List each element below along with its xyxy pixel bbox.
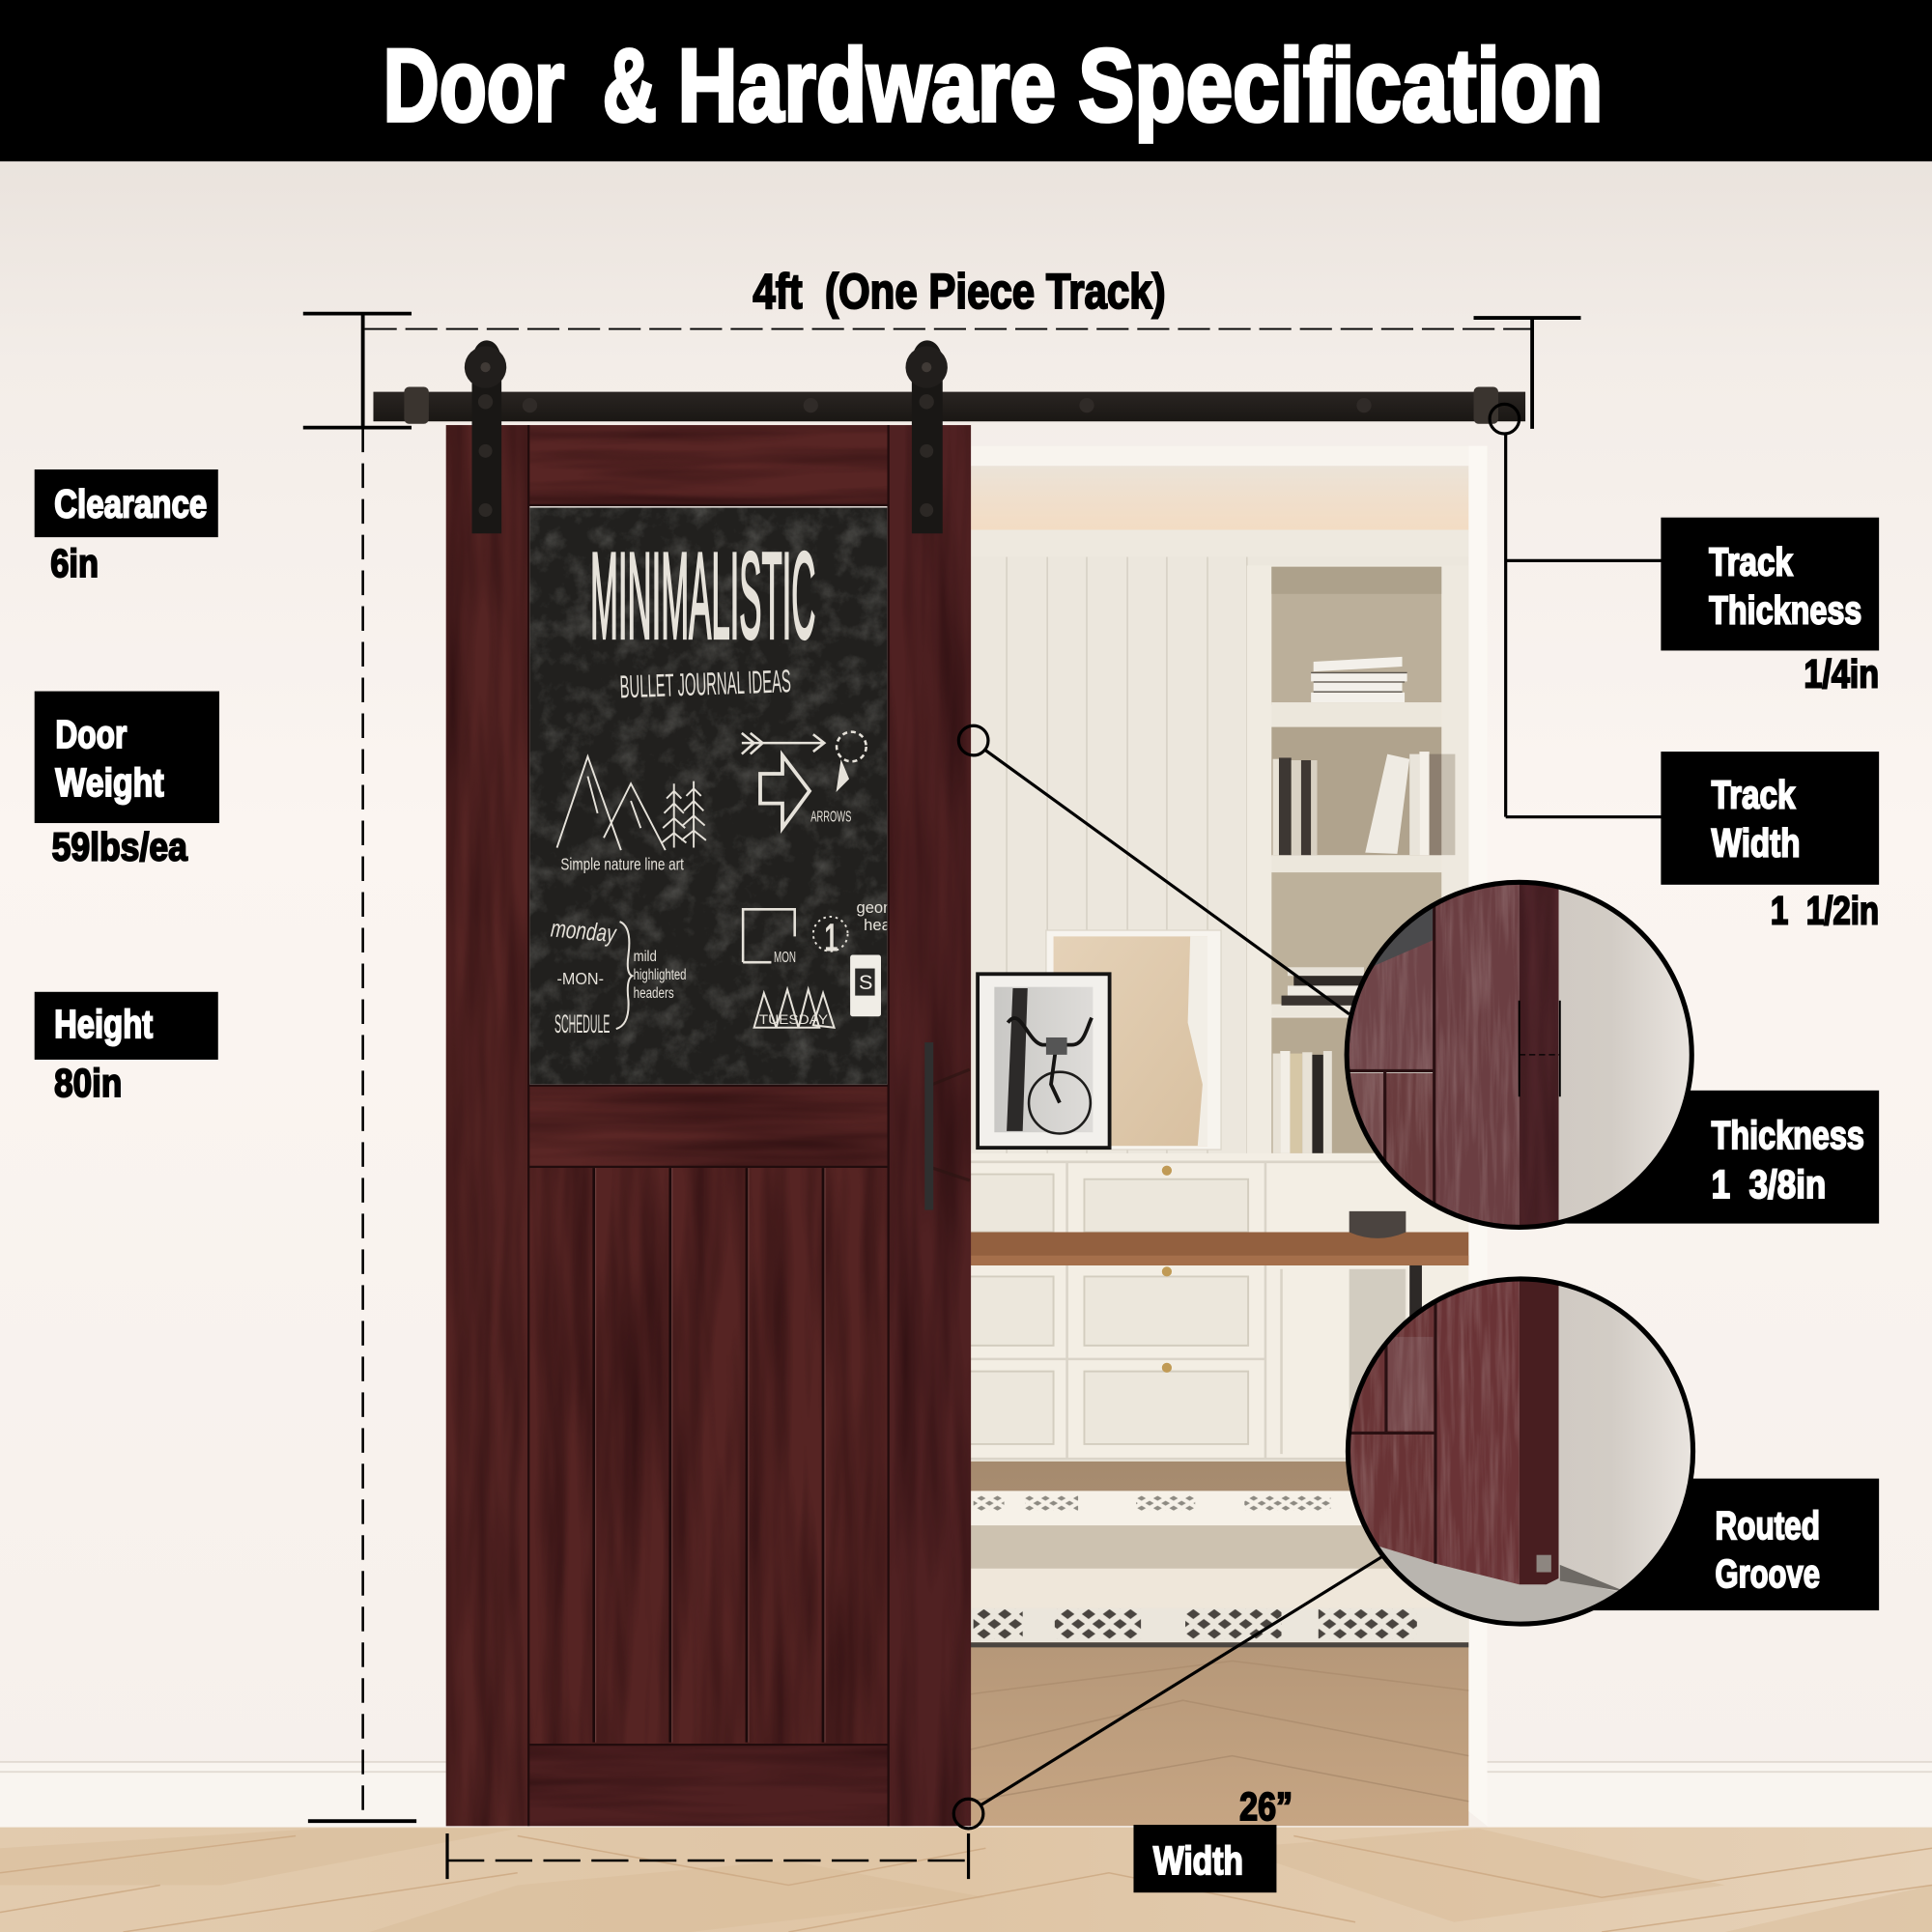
title: & xyxy=(603,27,657,143)
bookcase xyxy=(1247,565,1468,1157)
thickness pointer xyxy=(958,725,1350,1014)
label: thickness: 1 3/8in xyxy=(1712,1162,1826,1207)
chalk caption nature: Simple nature line art xyxy=(560,855,684,874)
value: track thickness: 1/4in xyxy=(1804,652,1879,696)
chalk schedule doodles: monday xyxy=(550,915,618,948)
label: width xyxy=(1133,1825,1276,1892)
value: height: 80in xyxy=(54,1061,122,1105)
chalkboard: SCHEDULE xyxy=(554,1009,610,1038)
chalk tuesday bunting: TUESDAY xyxy=(759,1011,829,1027)
value: door weight: 59lbs/ea xyxy=(52,824,187,868)
bicycle photo frame xyxy=(976,972,1112,1150)
ceiling glow xyxy=(970,466,1468,532)
chalk label arrows: ARROWS xyxy=(810,810,851,826)
chalk cropped note: head xyxy=(864,916,899,934)
clearance dimension marker xyxy=(303,313,412,428)
chalk note: headers xyxy=(634,985,674,1002)
label: door weight xyxy=(35,692,219,823)
room seen through doorway xyxy=(970,466,1468,1826)
label: track width: Width xyxy=(1712,820,1801,865)
label: track thickness: Thickness xyxy=(1709,587,1861,632)
value: clearance: 6in xyxy=(50,541,99,585)
label: track thickness: Track xyxy=(1709,540,1793,584)
label: track thickness xyxy=(1661,518,1879,650)
left roller hanger xyxy=(465,340,506,533)
herringbone floor xyxy=(970,1661,1468,1802)
title xyxy=(384,27,1603,143)
top rail xyxy=(528,425,889,505)
chalk cropped note xyxy=(856,898,905,934)
track rail xyxy=(373,387,1525,424)
desk leg xyxy=(1409,1265,1422,1322)
title: Door xyxy=(384,27,564,143)
track length dashed dimension xyxy=(365,318,1580,429)
chalk numbered circle: 1 xyxy=(824,916,838,960)
chalk note xyxy=(634,949,686,1002)
rug xyxy=(970,1491,1468,1647)
label: track width: Track xyxy=(1712,773,1796,817)
label: height: Height xyxy=(54,1002,153,1046)
title: Specification xyxy=(1078,27,1603,143)
chalk S card: S xyxy=(859,970,872,994)
label: thickness xyxy=(1550,1091,1879,1224)
chalk box doodle: MON xyxy=(774,950,796,966)
value: track width: 1 1/2in xyxy=(1771,889,1879,933)
label: clearance: Clearance xyxy=(54,482,207,526)
crown moulding xyxy=(970,529,1468,559)
track length label: 4ft (One Piece Track) xyxy=(753,264,1166,319)
label: routed groove: Groove xyxy=(1716,1551,1820,1596)
chalk cropped note: geome xyxy=(856,898,905,917)
chalk tuesday bunting xyxy=(754,989,835,1028)
label: clearance xyxy=(35,469,218,537)
title: Hardware xyxy=(678,27,1056,143)
desk top xyxy=(970,1233,1468,1265)
track callout connector xyxy=(1490,404,1663,817)
chalkboard xyxy=(529,508,905,1084)
magnifier: routed groove detail xyxy=(1343,1276,1700,1634)
room floor xyxy=(970,1462,1468,1826)
chalk note: mild xyxy=(634,949,657,965)
value: width: 26” xyxy=(1239,1784,1293,1829)
chalk numbered circle xyxy=(813,916,848,960)
pull handle xyxy=(924,1042,970,1210)
label: routed groove: Routed xyxy=(1716,1503,1820,1548)
routed groove pointer xyxy=(953,1555,1385,1829)
label: width: Width xyxy=(1153,1838,1243,1883)
bottom rail xyxy=(528,1745,889,1826)
label: door weight: Door xyxy=(55,712,127,756)
door trim xyxy=(970,446,1488,1826)
baseboard xyxy=(0,1762,1932,1828)
barn door xyxy=(446,425,971,1826)
cabinets xyxy=(970,1153,1468,1463)
label: routed groove xyxy=(1577,1479,1879,1610)
door width dashed dimension xyxy=(447,1833,969,1879)
chalk note: highlighted xyxy=(634,967,686,983)
floor foreground xyxy=(0,1828,1932,1932)
right stile xyxy=(889,425,971,1826)
middle rail xyxy=(528,1086,889,1167)
right roller hanger xyxy=(906,340,948,533)
panelled wall xyxy=(970,557,1468,1161)
beige art frame xyxy=(1046,930,1221,1150)
chalk box doodle xyxy=(743,909,796,966)
height dashed dimension xyxy=(308,428,416,1821)
label: track width xyxy=(1661,752,1879,885)
left stile xyxy=(446,425,528,1826)
chalk mon: -MON- xyxy=(557,969,604,988)
chalk brace xyxy=(616,922,632,1029)
label: height xyxy=(35,992,218,1060)
books xyxy=(1273,657,1455,1153)
infographic canvas: MINIMALISTIC xyxy=(590,528,815,666)
chalk arrow doodles xyxy=(742,732,867,828)
chalkboard: BULLET JOURNAL IDEAS xyxy=(619,664,791,705)
magnifier: door thickness detail xyxy=(1343,880,1700,1237)
chalk S card xyxy=(850,955,881,1016)
plank panel xyxy=(528,1167,889,1745)
header bar xyxy=(0,0,1932,161)
bowl xyxy=(1350,1211,1406,1238)
label: thickness: Thickness xyxy=(1712,1113,1864,1157)
chalk mountains xyxy=(557,756,706,850)
label: door weight: Weight xyxy=(55,760,164,805)
